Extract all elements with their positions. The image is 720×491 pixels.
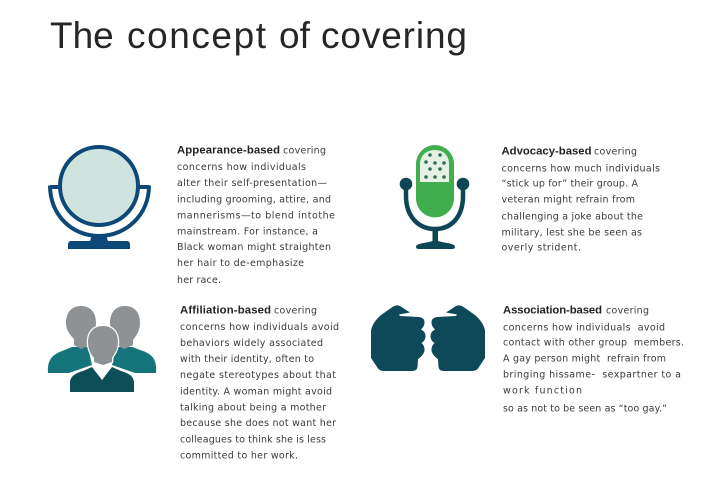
text: advocacy-based: challenging a joke about the	[502, 212, 643, 222]
text: association-based: A gay person might refrain from	[503, 354, 666, 364]
icon: two fists facing	[371, 305, 485, 371]
text: appearance-based: mannerisms—to blend intothe	[177, 210, 335, 222]
icon: mirror	[50, 147, 149, 249]
text: association-based	[503, 304, 684, 414]
text: association-based: so as not to be seen as “too gay.”	[503, 404, 667, 414]
text: advocacy-based	[502, 146, 660, 254]
panel: affiliation-based covering	[48, 304, 339, 462]
title: of	[279, 15, 311, 56]
text: appearance-based: Appearance-based	[177, 144, 280, 156]
text: appearance-based: Black woman might straighten	[177, 242, 331, 253]
text: affiliation-based: negate stereotypes about that	[180, 370, 336, 381]
text: affiliation-based: because she does not want her	[180, 418, 336, 429]
text: association-based: bringing hissame- sexpartner to a	[503, 370, 681, 380]
text: association-based: Association-based	[503, 304, 602, 316]
text: association-based: work function	[503, 386, 582, 396]
text: appearance-based: her race.	[177, 275, 221, 286]
text: affiliation-based: colleagues to think she is less	[180, 434, 326, 446]
text: advocacy-based: Advocacy-based	[502, 146, 592, 158]
text: appearance-based: covering	[283, 146, 326, 156]
text: affiliation-based: with their identity, often to	[180, 354, 314, 365]
text: advocacy-based: “stick up for” their group. A	[502, 178, 638, 190]
text: appearance-based: mainstream. For instance, a	[177, 226, 318, 238]
panel: advocacy-based covering	[400, 145, 660, 254]
title: covering	[321, 15, 467, 56]
title	[50, 15, 467, 56]
text: advocacy-based: overly strident.	[502, 242, 581, 254]
text: affiliation-based: behaviors widely associated	[180, 338, 323, 349]
text: association-based: contact with other group members.	[503, 338, 684, 348]
text: association-based: covering	[606, 306, 649, 316]
text: affiliation-based: Affiliation-based	[180, 304, 271, 316]
text: affiliation-based: identity. A woman might avoid	[180, 386, 332, 398]
icon: microphone	[400, 145, 469, 249]
text: advocacy-based: covering	[594, 146, 637, 158]
title: concept	[127, 15, 267, 56]
text: appearance-based: including grooming, attire, and	[177, 194, 331, 206]
text: appearance-based: alter their self-presentation—	[177, 178, 328, 189]
text: advocacy-based: veteran might refrain from	[502, 194, 635, 206]
text: association-based: concerns how individuals avoid	[503, 322, 665, 334]
text: affiliation-based: committed to her work.	[180, 450, 298, 462]
text: affiliation-based	[180, 304, 339, 462]
text: advocacy-based: concerns how much individuals	[502, 164, 660, 174]
title: The	[50, 15, 114, 56]
text: affiliation-based: covering	[274, 306, 317, 316]
text: advocacy-based: military, lest she be seen as	[502, 228, 642, 238]
icon: group of people	[48, 306, 156, 392]
text: affiliation-based: talking about being a mother	[180, 402, 326, 414]
text: appearance-based: concerns how individuals	[177, 162, 306, 173]
text: appearance-based: her hair to de-emphasize	[177, 258, 304, 269]
text: affiliation-based: concerns how individuals avoid	[180, 322, 339, 333]
panel: association-based covering	[371, 304, 684, 414]
panel: appearance-based covering	[50, 144, 335, 286]
text: appearance-based	[177, 144, 335, 286]
